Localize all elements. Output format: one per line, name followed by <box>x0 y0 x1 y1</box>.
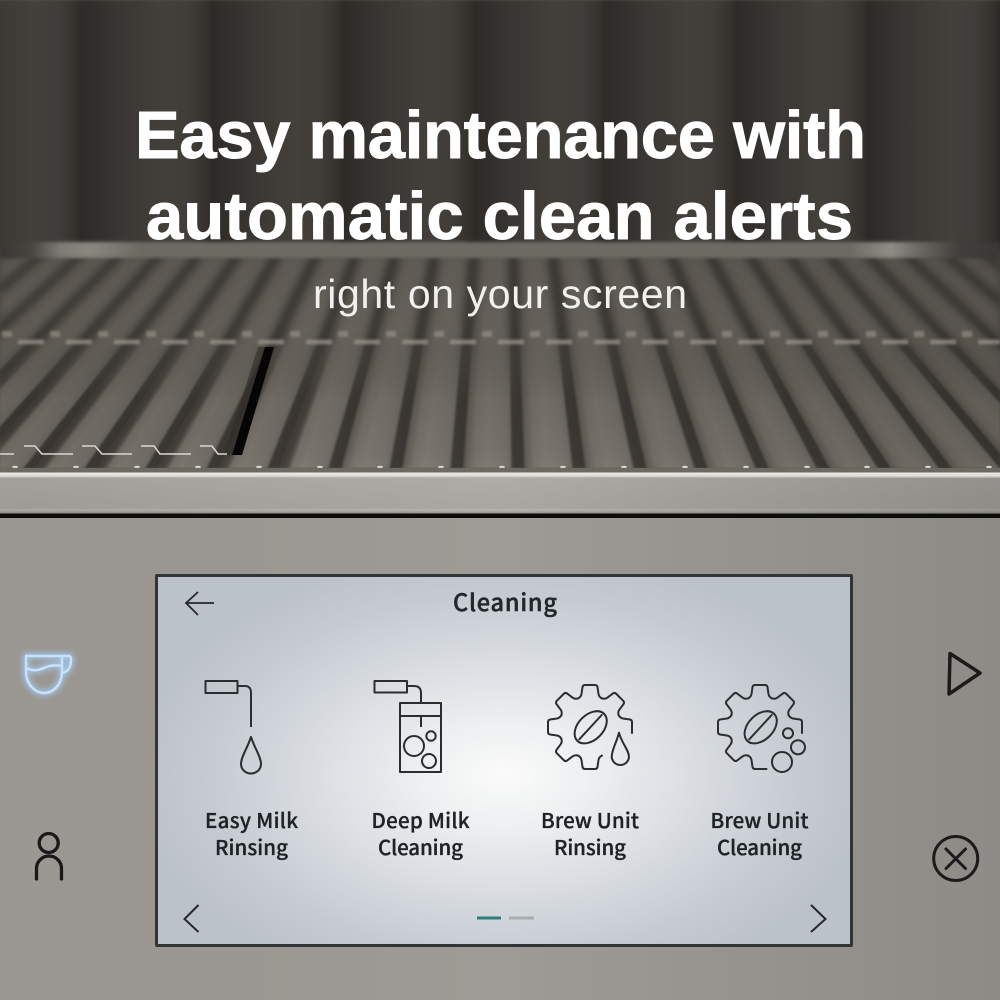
near zigzag cut line <box>0 446 227 454</box>
icon: brew unit rinsing <box>548 685 632 769</box>
slot in grate <box>224 347 274 455</box>
touch screen panel <box>155 574 853 947</box>
headline text <box>135 98 866 317</box>
label: deep milk cleaning <box>372 804 470 861</box>
rear rail of the tray <box>0 242 1000 258</box>
drip tray grate, near sharp part <box>0 352 1000 468</box>
label: brew unit rinsing: Brew Unit <box>541 804 639 834</box>
label: brew unit rinsing: Rinsing <box>554 831 626 861</box>
icon: previous chevron <box>184 905 198 932</box>
label: brew unit cleaning: Cleaning <box>717 831 802 861</box>
screen heading: Cleaning <box>453 584 557 618</box>
background: dark ribbed wall <box>0 0 1000 250</box>
icon: glowing cup button <box>26 656 71 693</box>
icon: back arrow <box>186 592 214 615</box>
subtitle: right on your screen <box>313 271 687 317</box>
title line 2: automatic clean alerts <box>146 179 853 254</box>
label: easy milk rinsing <box>205 804 298 861</box>
label: deep milk cleaning: Deep Milk <box>372 804 470 834</box>
grate details: slot, cross lines, rivets <box>0 330 1000 468</box>
far cross line <box>0 334 1000 342</box>
icon: user profile button <box>36 834 62 879</box>
drip tray grate, far blurred part <box>0 258 1000 359</box>
label: deep milk cleaning: Cleaning <box>378 831 463 861</box>
label: brew unit rinsing <box>541 804 639 861</box>
pager dots <box>477 916 534 920</box>
label: brew unit cleaning <box>710 804 808 861</box>
control panel body <box>0 518 1000 1000</box>
icon: next chevron <box>811 905 826 932</box>
icon: easy milk rinsing <box>206 681 261 774</box>
icon: cancel button <box>934 836 978 880</box>
label: brew unit cleaning: Brew Unit <box>710 804 808 834</box>
label: easy milk rinsing: Rinsing <box>215 831 288 861</box>
label: easy milk rinsing: Easy Milk <box>205 804 298 834</box>
title line 1: Easy maintenance with <box>135 98 866 173</box>
metal bar sheen <box>0 478 1000 513</box>
icon: brew unit cleaning <box>718 685 805 772</box>
grate side shading <box>0 250 1000 468</box>
icon: deep milk cleaning <box>374 681 441 772</box>
rivets along grate edge <box>12 466 992 468</box>
metal front bar <box>0 468 1000 518</box>
grate depth shading <box>0 250 1000 468</box>
icon: play button <box>949 654 980 694</box>
